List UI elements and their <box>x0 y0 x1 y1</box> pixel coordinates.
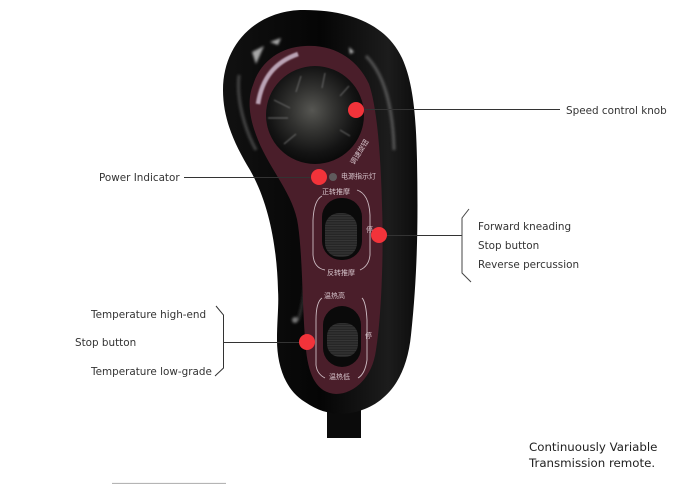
faceplate <box>250 46 383 394</box>
callout: temperature switch: Temperature high-end <box>90 309 206 321</box>
faceplate printed labels: 停 <box>365 331 372 340</box>
faceplate printed labels: 停 <box>366 225 373 234</box>
faceplate printed labels: 正转推摩 <box>322 187 350 196</box>
lower slide switch <box>316 298 367 378</box>
faceplate printed labels <box>322 138 376 381</box>
cable <box>327 406 361 438</box>
body highlights <box>238 38 394 323</box>
faceplate sheen <box>258 54 298 104</box>
faceplate printed labels: 温热高 <box>324 291 345 300</box>
faceplate printed labels: 反转推摩 <box>327 268 355 277</box>
caption: Transmission remote. <box>528 456 655 470</box>
remote body <box>223 10 417 414</box>
faceplate printed labels: 电源指示灯 <box>341 172 376 180</box>
remote control <box>223 10 417 438</box>
power indicator lamp <box>329 173 337 181</box>
callout: kneading switch: Reverse percussion <box>478 259 579 271</box>
callout: kneading switch: Forward kneading <box>478 221 571 233</box>
caption: Continuously Variable <box>529 440 657 454</box>
callout: temperature switch <box>75 306 315 378</box>
callout: power indicator: Power Indicator <box>99 172 180 184</box>
faceplate printed labels: 温热低 <box>329 372 350 381</box>
callout: temperature switch: Temperature low-grade <box>90 366 212 378</box>
speed knob <box>266 66 364 164</box>
callout: speed control knob <box>348 102 667 118</box>
upper slide switch <box>313 190 370 270</box>
callout: kneading switch <box>371 209 579 282</box>
caption <box>528 440 657 470</box>
faceplate printed labels: 调速旋钮 <box>348 138 371 166</box>
callout: speed control knob: Speed control knob <box>566 105 667 117</box>
bottom edge shadow <box>112 482 226 484</box>
callout: power indicator <box>99 169 327 185</box>
callout: kneading switch: Stop button <box>478 240 539 252</box>
callout: temperature switch: Stop button <box>75 337 136 349</box>
